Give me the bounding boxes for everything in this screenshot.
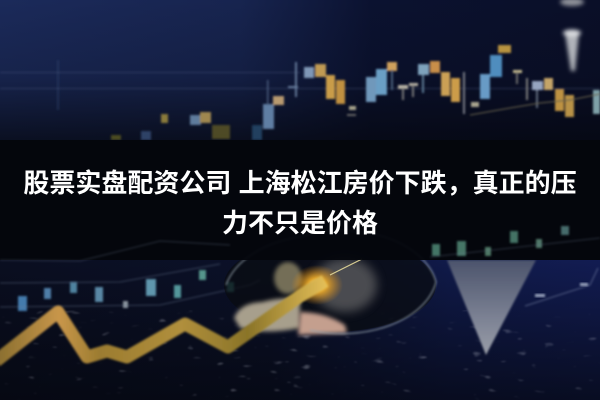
upper right spotlight: [560, 0, 584, 71]
title: 股票实盘配资公司 上海松江房价下跌，真正的压: [23, 168, 577, 198]
cone of light: [447, 260, 536, 355]
upper trend line: [470, 94, 600, 115]
title: [23, 168, 577, 238]
lower candlesticks: [18, 270, 234, 311]
city lights texture: [0, 310, 600, 400]
title: 力不只是价格: [222, 208, 378, 238]
gold zigzag arrow: [0, 281, 325, 361]
dark title band with faint lower candlesticks: [0, 140, 600, 261]
hand and glowing circle: [224, 230, 436, 335]
upper candlesticks: [0, 45, 600, 140]
lower trend lines: [0, 264, 598, 307]
